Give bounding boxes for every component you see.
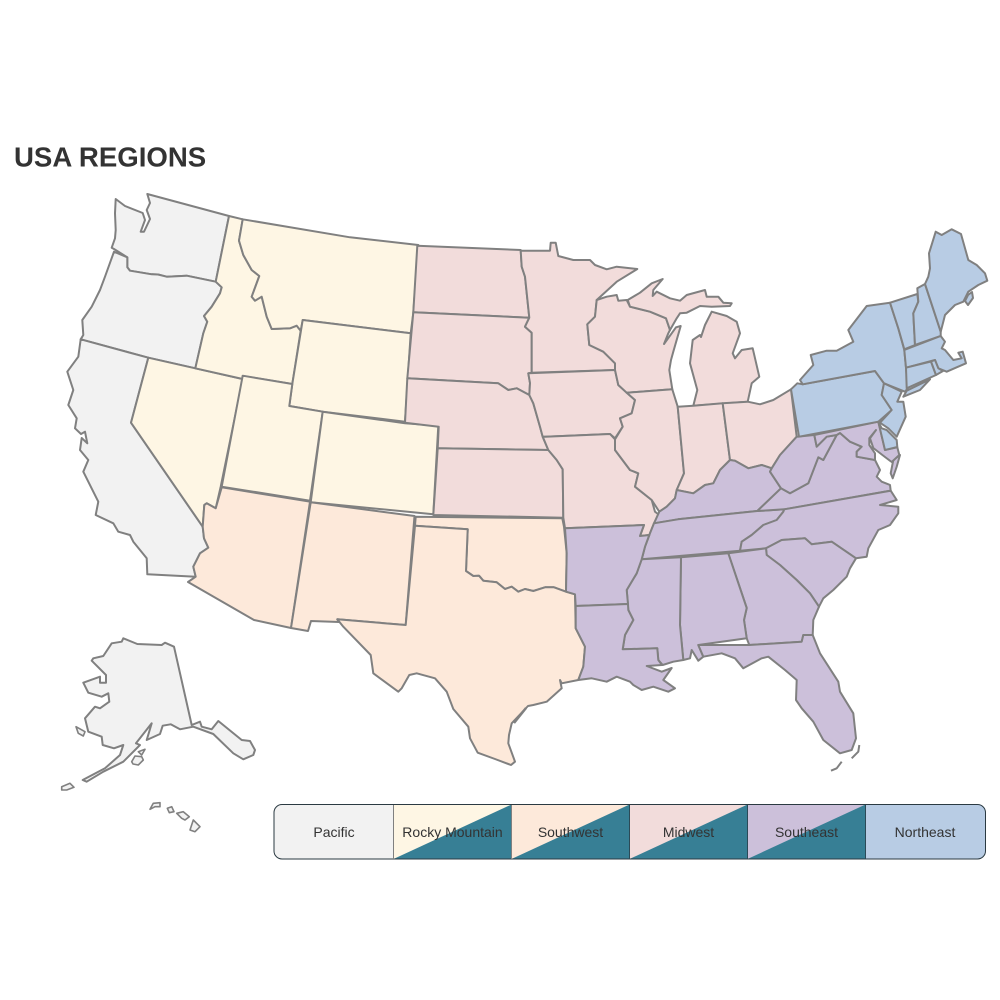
state: Illinois [615,389,684,512]
state: New York [800,303,908,392]
legend item: Northeast [866,804,986,859]
state: North Carolina [740,491,898,558]
state: Idaho [195,216,301,384]
state: Nevada [131,358,243,527]
state: Washington [112,194,229,282]
state: Nebraska [405,378,548,450]
state: Florida [698,635,856,753]
region: Pacific [62,194,255,832]
state: South Carolina [766,538,856,607]
legend item: Southeast [748,804,866,859]
region: Southeast [565,422,900,771]
legend item: Midwest: Midwest [663,824,714,840]
legend item: Rocky Mountain: Rocky Mountain [402,824,503,840]
state: Pennsylvania [791,371,892,437]
state: Kansas [433,448,563,518]
state: Oklahoma [415,517,567,592]
state: Texas [337,526,585,765]
Maine islands [965,292,973,305]
state: North Dakota [413,246,529,318]
state: Maine [925,229,987,332]
region: Northeast [791,229,987,450]
state: Mississippi [623,557,683,665]
state: Virginia eastern shore [891,455,900,478]
Alaska islands [62,727,145,790]
state: Iowa [528,370,635,438]
state: Indiana [677,403,730,493]
state: New York, Long Island [903,379,930,397]
state: Montana [239,219,418,333]
state: Michigan lower peninsula [690,312,759,406]
Hawaii [150,803,200,832]
state: Utah [222,376,323,501]
region: Midwest [405,243,797,536]
legend item: Pacific: Pacific [313,824,355,840]
state: New Hampshire [913,284,941,345]
state: Vermont [890,294,918,349]
legend item: Southwest: Southwest [538,824,603,840]
state: New Jersey [880,383,906,437]
legend item: Midwest [630,804,748,859]
legend item: Rocky Mountain [394,804,512,859]
state: West Virginia [770,435,837,493]
state: Virginia [757,433,891,511]
state: Maryland [814,422,899,462]
state: Alaska [83,638,255,782]
state: South Dakota [407,312,532,395]
state: Rhode Island [931,360,943,375]
state: Colorado [311,412,438,514]
state: Minnesota [521,243,637,373]
legend item: Northeast: Northeast [895,824,955,840]
state: Arkansas [565,525,649,606]
state: Missouri [543,434,659,536]
state: California [67,339,208,577]
state: Alabama [680,553,747,661]
Texas bay detail [514,708,526,723]
state: Wisconsin [587,295,681,393]
region: Southwest [188,487,585,765]
state: Arizona [188,487,310,628]
state: Connecticut [906,362,936,388]
Florida Keys [831,745,859,771]
state: New Mexico [291,502,414,631]
state: Michigan upper peninsula [628,279,732,330]
state: Wyoming [289,320,411,422]
legend item: Southeast: Southeast [775,824,838,840]
legend [274,804,986,859]
state: Tennessee [642,509,784,559]
title: USA REGIONS [14,142,206,172]
legend item: Southwest [512,804,630,859]
state: Georgia [728,548,819,645]
state: Louisiana [576,604,675,692]
state: Massachusetts [904,336,966,372]
state: Ohio [723,389,797,468]
state: Oregon [81,252,222,368]
legend item: Pacific [274,804,394,859]
state: Kentucky [654,460,781,523]
state: Delaware [878,422,897,450]
legend frame [274,804,986,859]
map of the United States [62,194,987,832]
region: Rocky Mountain [131,216,438,527]
